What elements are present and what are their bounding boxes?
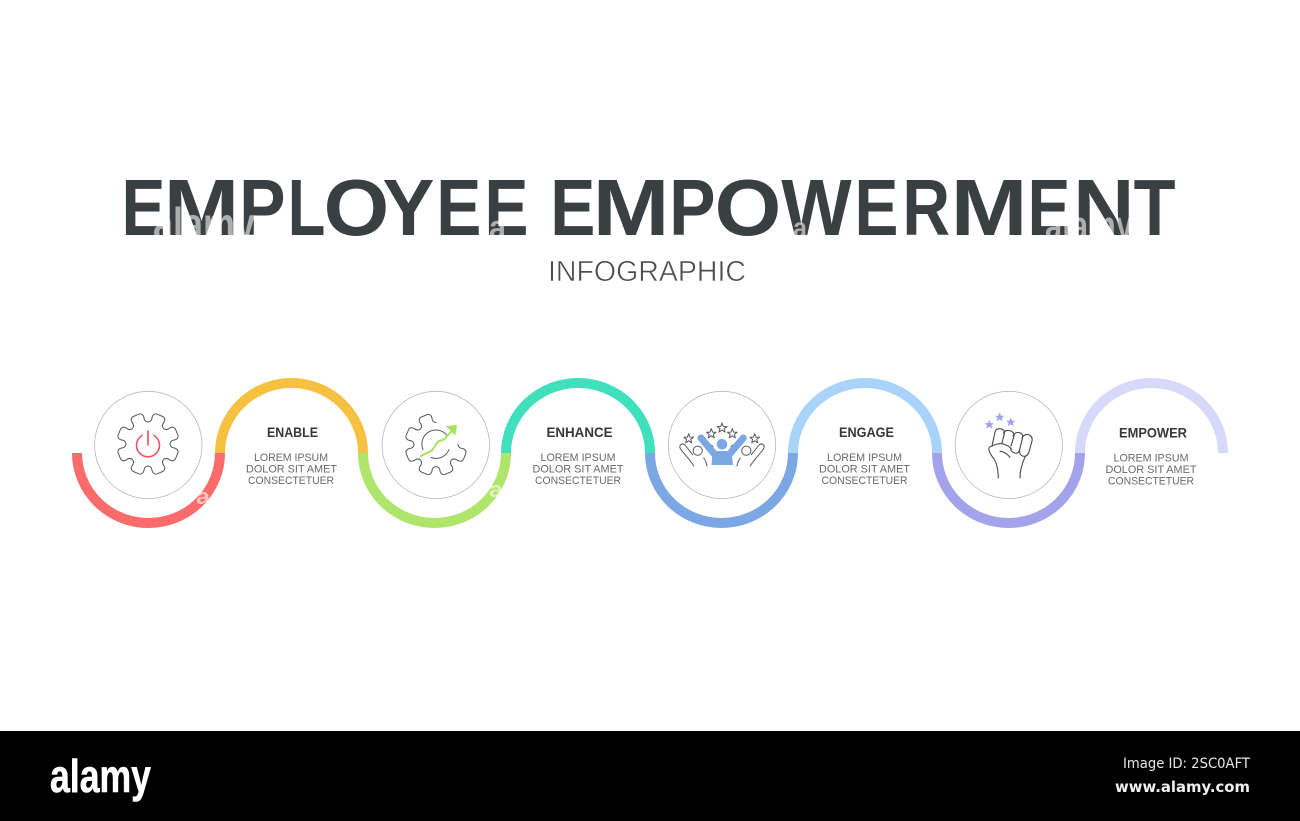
heading: engage: ENGAGE (839, 425, 894, 440)
body: engage: DOLOR SIT AMET (819, 464, 910, 476)
title: E (122, 163, 165, 252)
arc: purple (937, 453, 1080, 523)
icon: gear with growth arrow (404, 413, 468, 476)
step 3: text (819, 425, 910, 487)
title (122, 163, 1176, 252)
step 2: enhance icon (382, 391, 489, 499)
title: L (288, 163, 325, 252)
heading: empower: EMPOWER (1119, 426, 1187, 440)
watermark fragments (153, 198, 1133, 509)
body: empower (1106, 452, 1197, 488)
body: enhance: LOREM IPSUM (540, 452, 616, 464)
path segments: wave (77, 383, 1223, 523)
step 1: enable icon (95, 391, 202, 499)
body: engage: CONSECTETUER (822, 475, 908, 487)
title: T (1134, 163, 1176, 252)
body: enable: CONSECTETUER (248, 475, 334, 487)
website: www.alamy.com (1115, 778, 1250, 796)
body: empower: CONSECTETUER (1108, 476, 1194, 488)
step 2: text (532, 425, 624, 487)
title: O (324, 163, 389, 252)
body: enable (246, 452, 337, 487)
title: P (669, 163, 716, 252)
heading: enhance: ENHANCE (546, 425, 612, 440)
icon: gear with power symbol (116, 412, 180, 476)
title: E (854, 163, 898, 252)
body: empower: DOLOR SIT AMET (1106, 464, 1197, 476)
title: R (902, 163, 950, 252)
circle (955, 391, 1062, 499)
step 4: text (1106, 426, 1197, 488)
footer bar (0, 731, 1300, 821)
step 4: empower icon (955, 391, 1062, 499)
title: E (1028, 163, 1070, 252)
watermark fragments: a (489, 477, 504, 502)
body: enhance (532, 452, 624, 487)
subtitle: INFOGRAPHIC (548, 256, 746, 288)
arc: lavender (1080, 383, 1223, 453)
body: enable: LOREM IPSUM (254, 452, 328, 464)
watermark fragments: a (196, 484, 211, 509)
icon: team with stars (680, 423, 764, 466)
title: M (593, 163, 670, 252)
arc: green (363, 453, 506, 523)
arc: teal (506, 383, 650, 453)
logo: alamy: alamy (50, 750, 151, 802)
title: E (436, 163, 481, 252)
title: P (239, 163, 286, 252)
heading: enable: ENABLE (267, 425, 318, 440)
title: W (781, 163, 852, 252)
watermark fragments: a (793, 212, 807, 245)
body: engage: LOREM IPSUM (827, 452, 902, 464)
body: enhance: CONSECTETUER (535, 475, 621, 487)
arc: blue (650, 453, 793, 523)
watermark fragments: alamy (1045, 202, 1133, 249)
step 1: text (246, 425, 337, 487)
body: enhance: DOLOR SIT AMET (532, 464, 624, 476)
body: enable: DOLOR SIT AMET (246, 464, 337, 476)
circle (95, 391, 202, 499)
title: N (1073, 163, 1134, 252)
arc: yellow (220, 383, 363, 453)
title: O (715, 163, 781, 252)
watermark fragments: a (489, 207, 507, 248)
icon: raised fist with stars (984, 412, 1032, 478)
watermark fragments: alamy (153, 198, 255, 250)
title: M (164, 163, 239, 252)
title: M (951, 163, 1028, 252)
circle (382, 391, 489, 499)
arc: light blue (793, 383, 937, 453)
body: empower: LOREM IPSUM (1114, 452, 1188, 464)
step 3: engage icon (668, 391, 776, 499)
title: E (484, 163, 528, 252)
image id: Image ID: 2SC0AFT (1123, 756, 1250, 772)
body: engage (819, 452, 910, 487)
title: E (550, 163, 595, 252)
title: Y (382, 163, 434, 252)
arc: red (77, 453, 220, 523)
circle (668, 391, 776, 499)
